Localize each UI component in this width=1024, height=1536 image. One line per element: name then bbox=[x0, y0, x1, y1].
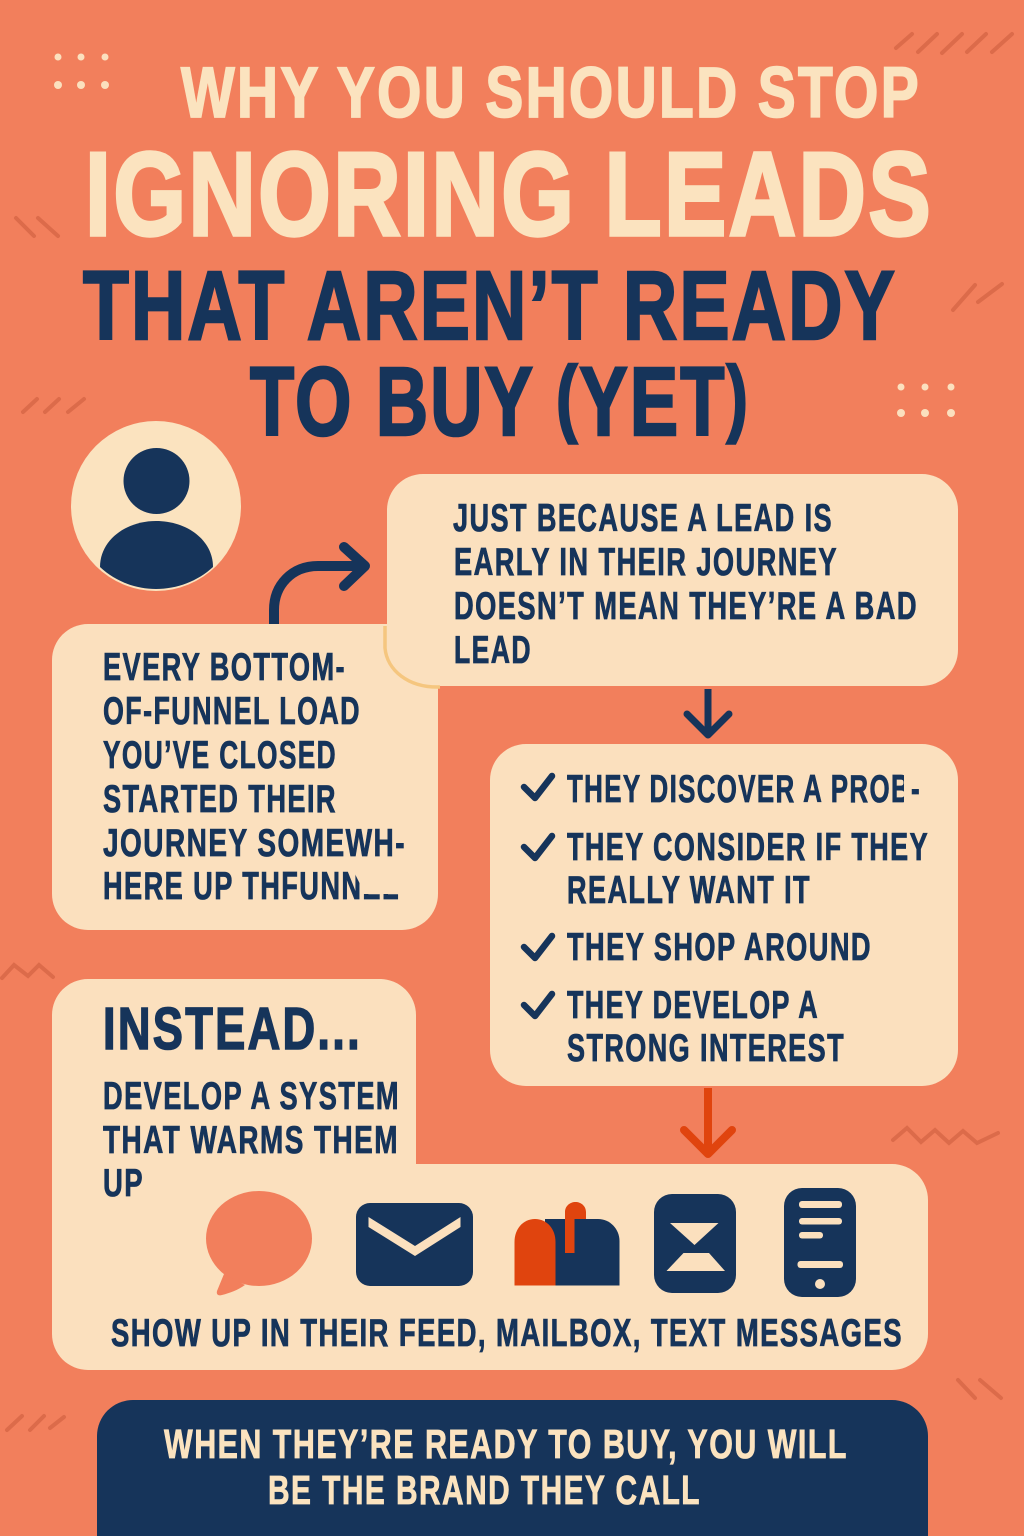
checklist text: THEY DEVELOP A bbox=[567, 984, 819, 1027]
arrow: red down bbox=[684, 1088, 732, 1154]
icon: envelope bbox=[356, 1203, 473, 1286]
text: funnel journey: EVERY BOTTOM- bbox=[103, 646, 346, 689]
panel: instead bbox=[52, 979, 928, 1370]
text: develop a system: DEVELOP A SYSTEM bbox=[103, 1075, 400, 1118]
text: early in journey: JUST BECAUSE A LEAD IS bbox=[453, 497, 833, 540]
title: ) bbox=[727, 350, 750, 445]
text: funnel journey: STARTED THEIR bbox=[103, 778, 337, 821]
title bbox=[83, 54, 933, 456]
arrow: down to checklist bbox=[687, 689, 729, 735]
icon: speech bubble bbox=[206, 1191, 312, 1295]
panel: checklist bbox=[490, 744, 958, 1086]
text: early in journey: EARLY IN THEIR JOURNEY bbox=[454, 541, 838, 584]
text: develop a system bbox=[103, 1075, 400, 1205]
text: develop a system: UP bbox=[103, 1162, 144, 1205]
title: ( bbox=[556, 350, 579, 445]
checklist text: REALLY WANT IT bbox=[567, 869, 811, 912]
title: YET bbox=[579, 347, 727, 456]
text: closing message bbox=[164, 1421, 848, 1513]
text: funnel journey bbox=[103, 646, 406, 908]
text: early in journey bbox=[453, 497, 918, 672]
text: early in journey: LEAD bbox=[454, 629, 532, 672]
text: funnel journey: YOU’VE CLOSED bbox=[103, 734, 337, 777]
panel: early in journey bbox=[385, 474, 958, 687]
title: TO BUY bbox=[250, 347, 631, 456]
checklist text bbox=[567, 768, 929, 1070]
checklist text: THEY SHOP AROUND bbox=[567, 926, 872, 969]
icon: mailbox bbox=[514, 1202, 620, 1286]
text: funnel journey: JOURNEY SOMEWH- bbox=[103, 822, 406, 865]
checkmarks bbox=[524, 776, 552, 1016]
text: develop a system: THAT WARMS THEM bbox=[103, 1119, 399, 1162]
panel: funnel journey bbox=[52, 624, 438, 930]
icon: person avatar bbox=[71, 421, 241, 591]
icon: phone bbox=[784, 1188, 856, 1297]
text: funnel journey: OF-FUNNEL LOAD bbox=[103, 690, 361, 733]
banner: closing message bbox=[97, 1400, 928, 1536]
text: closing message: BE THE BRAND THEY CALL bbox=[268, 1467, 701, 1513]
checklist text: STRONG INTEREST bbox=[567, 1027, 845, 1070]
arrow: curved to top box bbox=[274, 547, 365, 624]
text: funnel journey: HERE UP THFUNNEL bbox=[103, 865, 400, 908]
heading: instead: INSTEAD... bbox=[103, 996, 362, 1062]
icon: hourglass bbox=[654, 1194, 736, 1293]
